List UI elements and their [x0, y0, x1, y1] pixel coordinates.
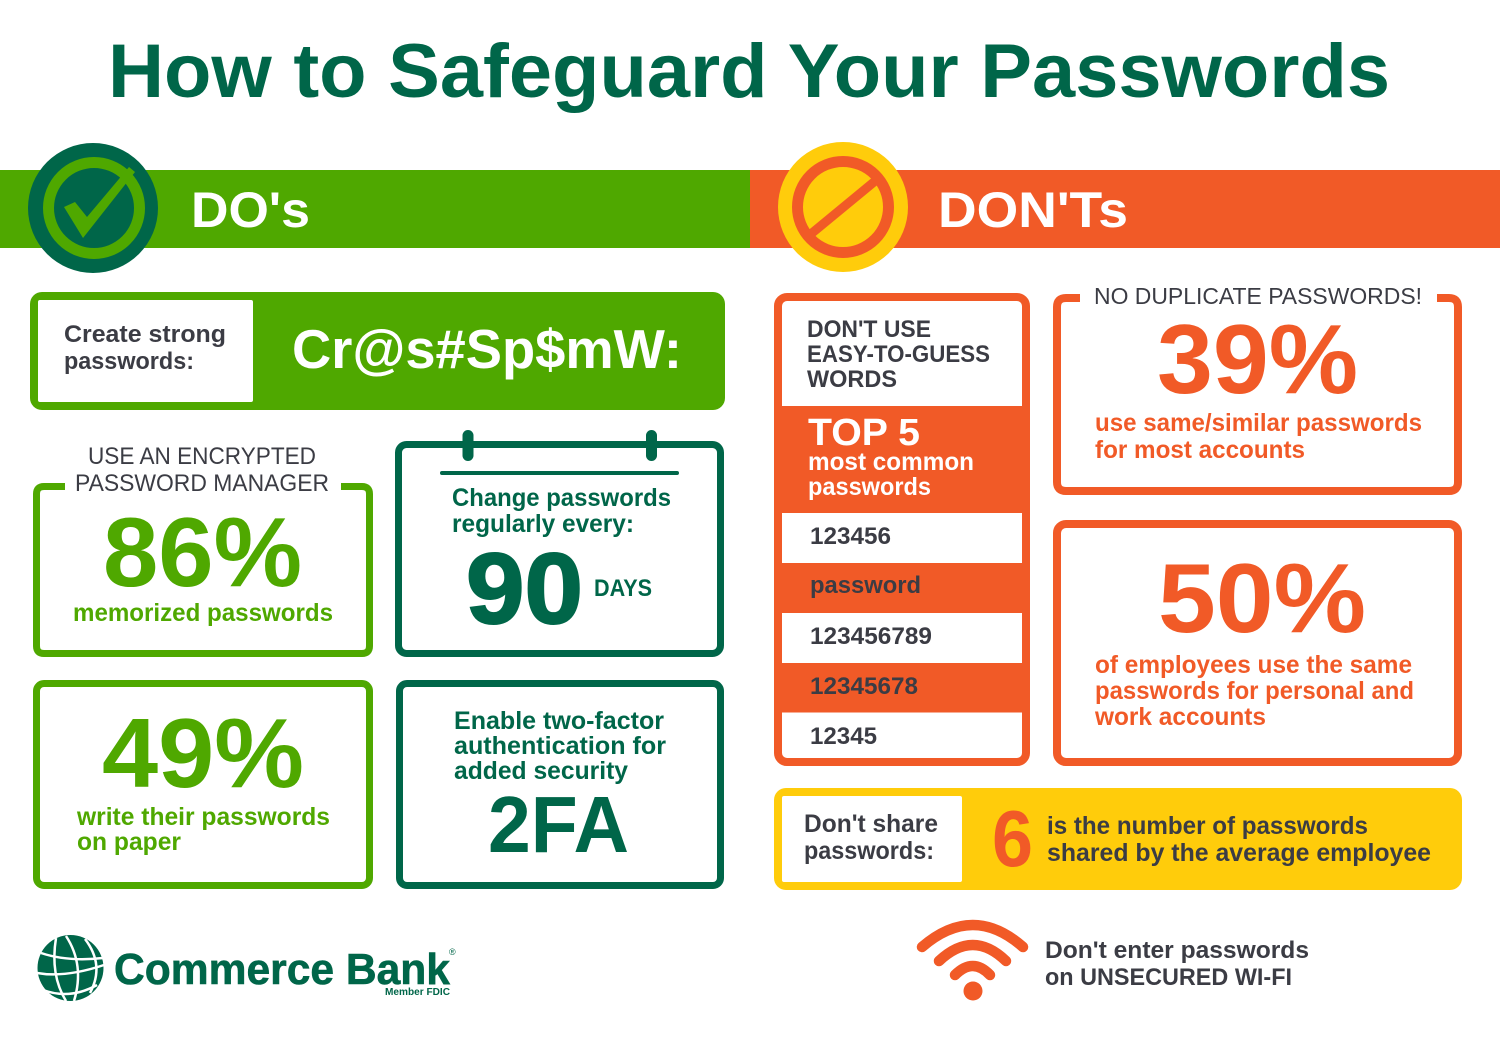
instruction text: regularly every:	[452, 510, 634, 538]
stat caption: on paper	[77, 828, 181, 856]
top 5 header	[782, 406, 1022, 513]
label: create strong passwords: passwords:	[64, 348, 194, 375]
instruction text: Enable two-factor	[454, 707, 664, 735]
panel: easy-to-guess words	[778, 297, 1026, 762]
password list	[782, 523, 1022, 750]
stat: 6: 6	[992, 794, 1033, 883]
top 5 header: passwords	[808, 473, 931, 501]
stat: 49%: 49%	[102, 698, 304, 808]
panel: password manager	[36, 443, 370, 654]
panel heading: EASY-TO-GUESS	[807, 341, 990, 368]
label: passwords:	[804, 837, 934, 865]
icon: globe	[37, 935, 104, 1001]
example password: Cr@s#Sp$mW:	[292, 318, 682, 380]
DON'Ts heading: DON'Ts	[938, 182, 1128, 238]
logo: Commerce Bank	[37, 935, 456, 1001]
stat caption: shared by the average employee	[1047, 839, 1431, 867]
password list: 12345678	[810, 673, 918, 700]
logo: Commerce Bank: ®	[449, 947, 456, 957]
stat caption: is the number of passwords	[1047, 812, 1368, 840]
DO's banner	[0, 143, 750, 273]
stat: 39%: 39%	[1157, 304, 1358, 414]
panel: create strong passwords	[30, 292, 725, 410]
stat caption: passwords for personal and	[1095, 677, 1414, 705]
label: create strong passwords: Create strong	[64, 321, 226, 348]
instruction text: authentication for	[454, 732, 666, 760]
icon: prohibited sign	[778, 142, 908, 272]
password list: password	[810, 572, 921, 599]
icon: check mark badge	[28, 143, 158, 273]
stat caption: of employees use the same	[1095, 651, 1412, 679]
logo: Commerce Bank: Member FDIC	[385, 987, 450, 998]
instruction text: added security	[454, 757, 628, 785]
panel: shared personal and work passwords	[1057, 524, 1458, 762]
panel heading: WORDS	[807, 366, 897, 393]
text: unsecured wi-fi warning: Don't enter passwords	[1045, 937, 1309, 964]
panel: no duplicate passwords	[1057, 283, 1458, 491]
2FA: 2FA	[488, 780, 629, 869]
stat caption: for most accounts	[1095, 436, 1305, 464]
stat caption: work accounts	[1094, 703, 1266, 731]
stat: 86%: 86%	[103, 497, 302, 607]
stat caption: write their passwords	[76, 803, 330, 831]
icon: wi-fi	[922, 925, 1023, 1000]
stat: 90 days: DAYS	[594, 575, 652, 602]
instruction text: Change passwords	[452, 484, 671, 512]
DON'Ts banner	[750, 142, 1500, 272]
panel: don't share passwords	[774, 788, 1462, 890]
password list: 12345	[810, 723, 877, 750]
logo: Commerce Bank: Commerce Bank	[114, 945, 450, 994]
stat caption: memorized passwords	[73, 599, 333, 627]
panel heading: DON'T USE	[807, 316, 931, 343]
stat: 90 days: 90	[466, 533, 583, 645]
panel: two-factor authentication	[400, 684, 720, 886]
stat caption: use same/similar passwords	[1095, 409, 1422, 437]
panel heading: PASSWORD MANAGER	[75, 470, 329, 497]
text: unsecured wi-fi warning: on UNSECURED WI-FI	[1045, 964, 1292, 991]
top 5 header: TOP 5	[808, 412, 920, 454]
password list: 123456	[810, 523, 891, 550]
password list: 123456789	[810, 623, 932, 650]
panel: written passwords	[36, 684, 370, 886]
top 5 header: most common	[808, 448, 974, 476]
panel heading: USE AN ENCRYPTED	[88, 443, 316, 470]
label: Don't share	[804, 810, 938, 838]
DO's heading: DO's	[191, 182, 310, 238]
panel: calendar, change passwords	[398, 430, 720, 654]
stat: 50%: 50%	[1158, 543, 1366, 653]
stat: 90 days	[466, 533, 652, 645]
title: How to Safeguard Your Passwords	[108, 29, 1390, 114]
panel heading: NO DUPLICATE PASSWORDS!	[1094, 283, 1422, 309]
